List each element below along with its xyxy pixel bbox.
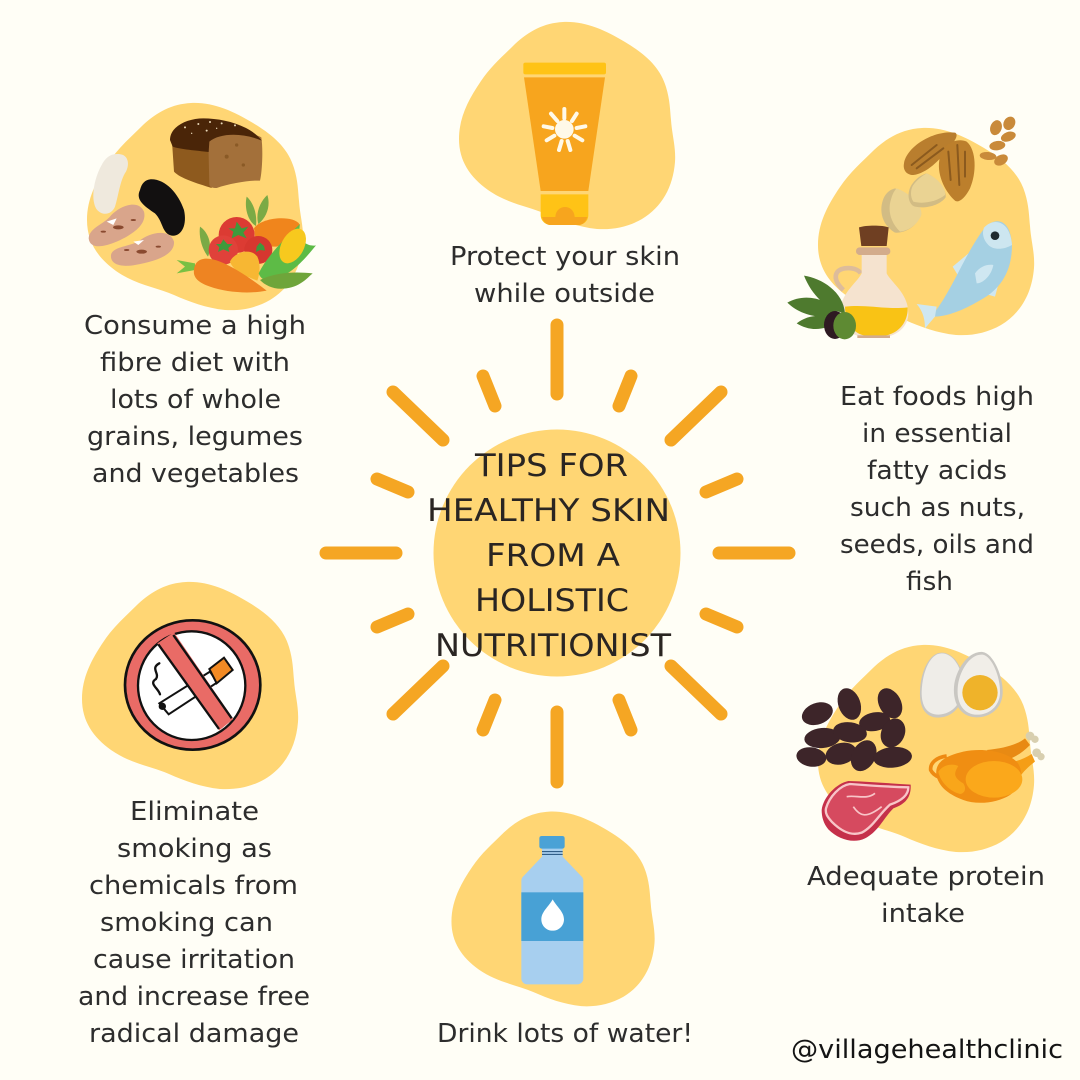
blob background (459, 22, 675, 229)
icon: roast chicken (931, 732, 1045, 803)
caption: fish (906, 567, 953, 597)
caption: fibre diet with (100, 348, 290, 378)
icon: sunscreen tube (523, 63, 606, 225)
icon: nuts and seeds (881, 114, 1018, 233)
icon: eggs (920, 652, 1003, 718)
panel: protein tip (795, 645, 1045, 929)
caption (450, 242, 680, 309)
caption: Protect your skin (450, 242, 680, 272)
icon: water bottle (521, 836, 583, 984)
icon: dark beans (795, 684, 913, 776)
icon: whole grain bread (170, 118, 262, 188)
caption (840, 382, 1034, 597)
icon: fish (917, 221, 1012, 328)
caption: intake (881, 899, 965, 929)
title: FROM A (486, 538, 620, 574)
caption: in essential (862, 419, 1012, 449)
caption: radical damage (89, 1019, 299, 1049)
caption: such as nuts, (850, 493, 1025, 523)
caption: and increase free (78, 982, 310, 1012)
panel: no smoking tip (78, 582, 310, 1049)
title: TIPS FOR (474, 448, 628, 484)
icon: beans (89, 154, 185, 266)
caption: Eat foods high (840, 382, 1034, 412)
caption: while outside (474, 279, 655, 309)
caption: cause irritation (93, 945, 295, 975)
caption: lots of whole (110, 385, 281, 415)
caption: Consume a high (84, 311, 306, 341)
caption (807, 862, 1045, 929)
caption: smoking can (100, 908, 273, 938)
blob background (818, 128, 1034, 335)
blob background (82, 582, 298, 789)
panel: high fibre diet tip (84, 103, 316, 489)
title (427, 448, 672, 664)
panel: essential fatty acids tip (787, 114, 1034, 597)
panel: water tip (437, 812, 693, 1049)
icon: no smoking sign (125, 620, 260, 750)
blob background (451, 812, 655, 1006)
caption: Eliminate (130, 797, 259, 827)
icon: oil bottle with olives (787, 226, 908, 339)
sun disc (434, 430, 680, 676)
caption: seeds, oils and (840, 530, 1034, 560)
central sun with rays (326, 325, 789, 782)
caption (78, 797, 310, 1049)
caption (84, 311, 306, 489)
blob background (818, 645, 1034, 852)
title: NUTRITIONIST (435, 628, 672, 664)
caption: grains, legumes (87, 422, 303, 452)
sun rays (326, 325, 789, 782)
panel: sunscreen tip (450, 22, 680, 309)
title: HOLISTIC (475, 583, 629, 619)
icon: steak (822, 781, 911, 841)
blob background (87, 103, 303, 310)
social handle: @villagehealthclinic (791, 1035, 1063, 1065)
icon: vegetables (177, 195, 316, 292)
caption: Adequate protein (807, 862, 1045, 892)
caption: Drink lots of water! (437, 1019, 693, 1049)
caption: smoking as (117, 834, 272, 864)
caption: and vegetables (92, 459, 299, 489)
caption: chemicals from (89, 871, 298, 901)
caption: fatty acids (867, 456, 1007, 486)
title: HEALTHY SKIN (427, 493, 670, 529)
